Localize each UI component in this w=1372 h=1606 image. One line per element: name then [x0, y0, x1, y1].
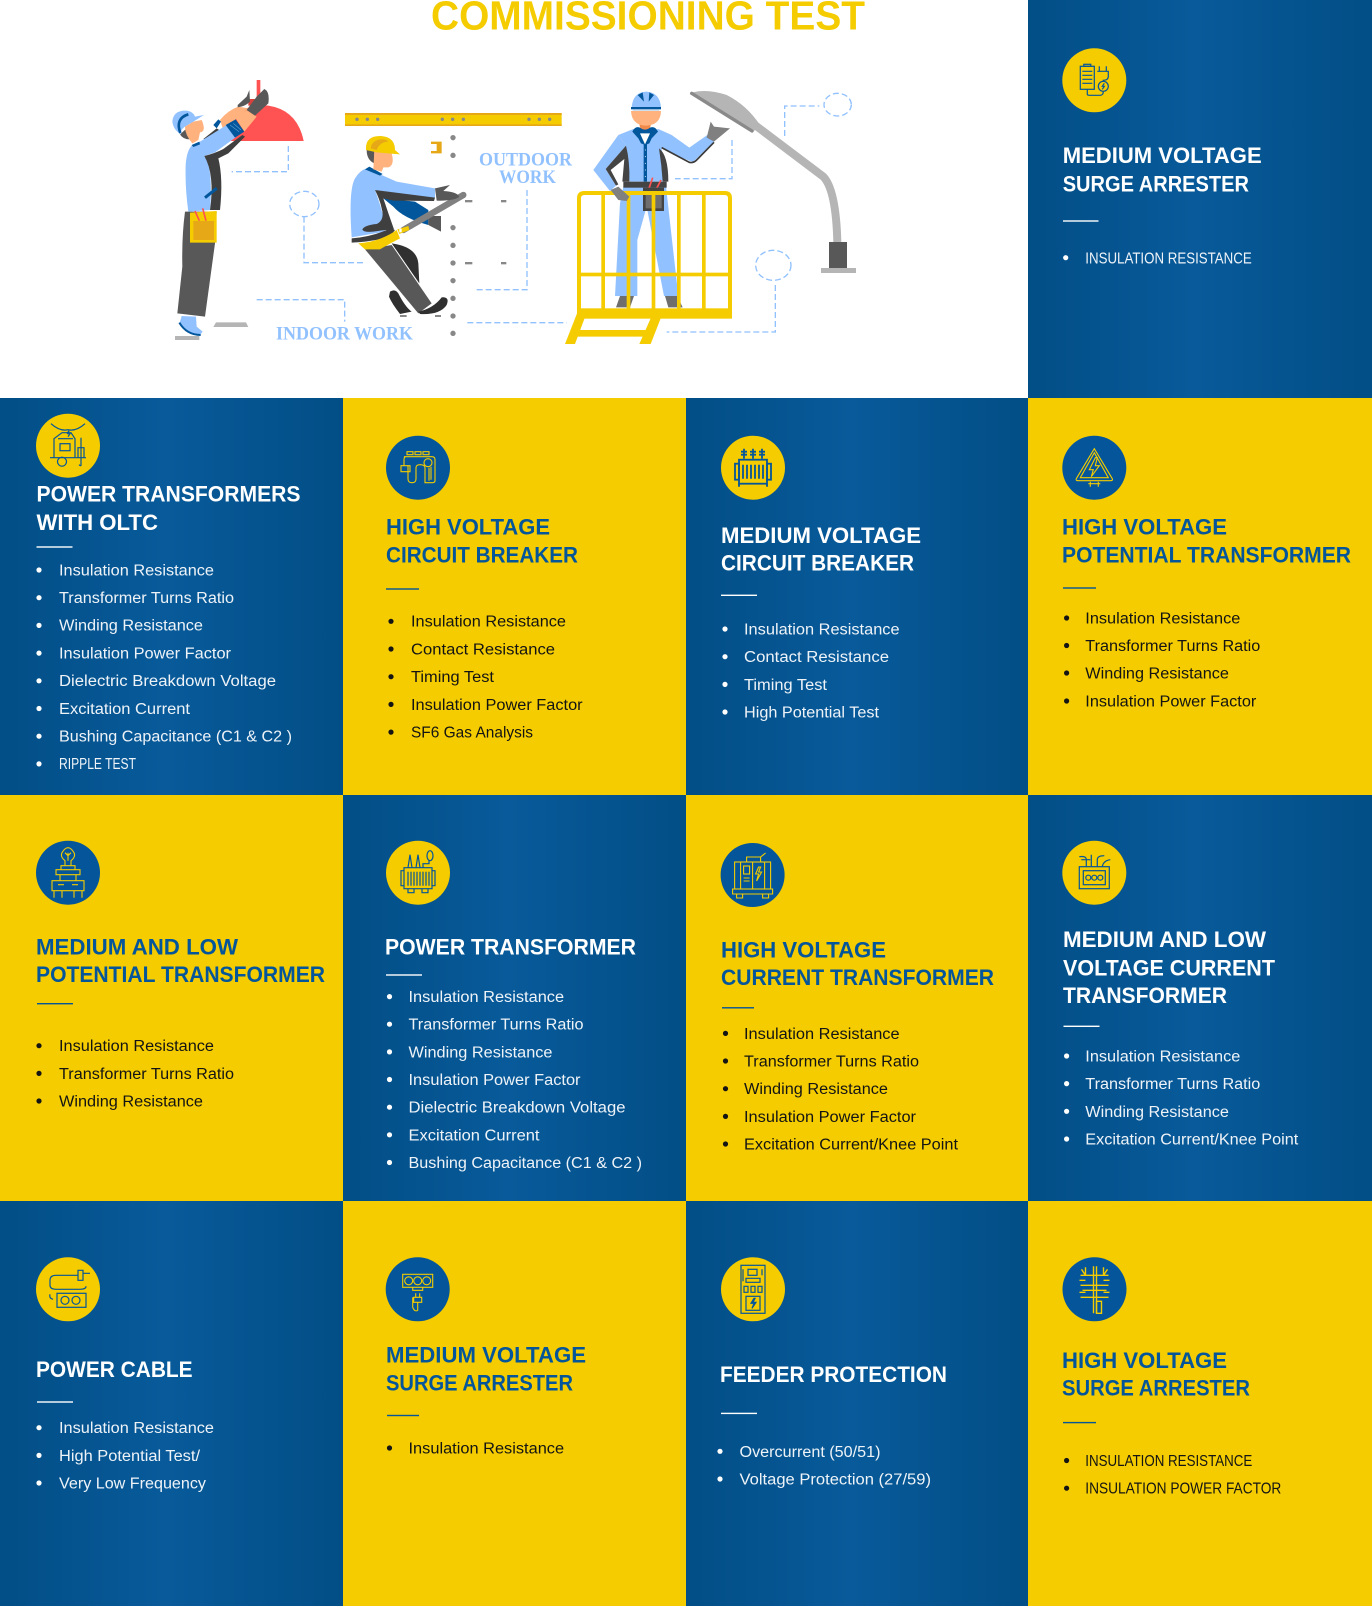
test list: Insulation Resistance [744, 622, 900, 638]
panel: medium voltage circuit breaker [686, 398, 1028, 795]
test list: Bushing Capacitance (C1 & C2 ) [59, 728, 292, 746]
panel: feeder protection [686, 1201, 1028, 1606]
test list: Transformer Turns Ratio [59, 590, 234, 607]
test list: Insulation Resistance [59, 1038, 214, 1055]
panel: high voltage current transformer [686, 795, 1028, 1201]
test list: Insulation Power Factor [1085, 694, 1256, 710]
test list [36, 1420, 214, 1492]
heading: FEEDER PROTECTION [720, 1362, 947, 1387]
label: indoor work: INDOOR WORK [276, 323, 413, 344]
icon: high voltage warning triangle [1062, 436, 1126, 500]
icon: metering box with wires [1062, 841, 1126, 905]
heading: SURGE ARRESTER [1062, 1376, 1250, 1400]
test list [1064, 1048, 1299, 1148]
heading: CIRCUIT BREAKER [386, 543, 578, 568]
illustration part: indoor workers [172, 80, 567, 340]
panel: high voltage surge arrester [1028, 1201, 1372, 1606]
heading: SURGE ARRESTER [1063, 172, 1249, 197]
worker three upper body [593, 92, 730, 211]
heading: HIGH VOLTAGE [1062, 514, 1227, 539]
heading: HIGH VOLTAGE [386, 514, 550, 539]
heading: POWER TRANSFORMERS [36, 482, 300, 507]
heading [36, 934, 325, 987]
test list: Voltage Protection (27/59) [740, 1472, 931, 1488]
heading: CIRCUIT BREAKER [721, 551, 914, 576]
test list: Insulation Resistance [744, 1026, 900, 1043]
test list [717, 1444, 931, 1488]
label: outdoor work: WORK [499, 167, 556, 188]
heading: VOLTAGE CURRENT [1063, 956, 1275, 981]
test list: Winding Resistance [59, 1094, 203, 1110]
test list: Winding Resistance [59, 618, 203, 635]
label: outdoor work [479, 150, 572, 188]
heading [1062, 514, 1351, 568]
test list: Insulation Resistance [1085, 1048, 1240, 1066]
panel: high voltage circuit breaker [343, 398, 686, 795]
test list: High Potential Test/ [59, 1448, 201, 1465]
panel: medium voltage surge arrester (top) [1028, 0, 1372, 398]
icon: battery and plug [1062, 48, 1126, 112]
test list: Overcurrent (50/51) [740, 1444, 880, 1461]
icon: utility pole [1062, 1257, 1126, 1321]
icon: protection relay panel [721, 1257, 785, 1321]
icon: cable and socket [36, 1257, 100, 1321]
heading: MEDIUM VOLTAGE [721, 523, 921, 548]
test list [722, 622, 900, 722]
illustration part: outdoor worker and street lamp [565, 91, 856, 344]
test list: Insulation Resistance [59, 562, 214, 579]
test list: Winding Resistance [1085, 1104, 1229, 1121]
test list: Winding Resistance [744, 1081, 888, 1098]
test list [388, 614, 583, 742]
heading: POWER TRANSFORMER [385, 934, 636, 960]
heading: POWER CABLE [36, 1357, 193, 1382]
test list [387, 989, 642, 1172]
panel: medium voltage surge arrester (bottom) [343, 1201, 686, 1606]
test list: Insulation Resistance [1085, 610, 1240, 628]
heading [386, 514, 578, 568]
heading [386, 1343, 586, 1395]
heading: HIGH VOLTAGE [1062, 1348, 1227, 1373]
panel: power transformer [343, 795, 686, 1201]
heading: MEDIUM VOLTAGE [1063, 143, 1262, 168]
heading: POTENTIAL TRANSFORMER [1062, 543, 1351, 568]
test list: INSULATION RESISTANCE [1085, 1453, 1252, 1470]
test list: Insulation Power Factor [408, 1072, 580, 1089]
test list: Timing Test [411, 669, 495, 686]
test list: RIPPLE TEST [59, 756, 136, 773]
test list [1064, 1453, 1281, 1498]
test list [36, 1038, 234, 1110]
test list: Insulation Resistance [408, 989, 564, 1006]
test list: Transformer Turns Ratio [1085, 1076, 1260, 1093]
panel: power transformers with OLTC [0, 398, 343, 795]
heading: TRANSFORMER [1063, 983, 1227, 1008]
heading: WITH OLTC [36, 510, 158, 535]
test list: Dielectric Breakdown Voltage [59, 673, 276, 690]
test list: Transformer Turns Ratio [59, 1066, 234, 1083]
heading: HIGH VOLTAGE [721, 938, 886, 962]
test list: Excitation Current [59, 701, 191, 718]
test list: Insulation Power Factor [744, 1109, 916, 1126]
test list: Insulation Resistance [59, 1420, 214, 1437]
test list: Excitation Current [408, 1127, 540, 1144]
heading: POTENTIAL TRANSFORMER [36, 962, 325, 987]
heading: MEDIUM AND LOW [1063, 927, 1267, 952]
test list [723, 1026, 959, 1154]
icon: mobile test trailer [36, 414, 100, 478]
test list [1064, 610, 1260, 710]
test list: Contact Resistance [744, 649, 889, 666]
icon: power strip [386, 1257, 450, 1321]
icon: circuit breaker [386, 436, 450, 500]
heading: CURRENT TRANSFORMER [721, 965, 994, 990]
test list: Transformer Turns Ratio [744, 1054, 919, 1070]
test list: Transformer Turns Ratio [1085, 638, 1260, 655]
panel: medium and low potential transformer [0, 795, 343, 1201]
heading: SURGE ARRESTER [386, 1370, 573, 1395]
heading: MEDIUM AND LOW [36, 934, 239, 960]
illustration: indoor and outdoor electrical workers [172, 80, 856, 344]
heading [1063, 143, 1262, 197]
test list: Insulation Power Factor [59, 645, 231, 662]
test list: Timing Test [744, 677, 828, 694]
test list: Very Low Frequency [59, 1476, 206, 1492]
heading [721, 523, 921, 576]
test list: Insulation Resistance [408, 1440, 564, 1458]
icon: transformer [721, 436, 785, 500]
worker two with tool [351, 136, 463, 314]
icon: potential transformer [36, 841, 100, 905]
test list [36, 562, 292, 773]
test list: Winding Resistance [1085, 666, 1229, 682]
icon: current transformer cabinet [721, 843, 785, 907]
test list: Contact Resistance [411, 641, 555, 658]
test list: Excitation Current/Knee Point [1085, 1132, 1299, 1148]
test list: Winding Resistance [408, 1044, 552, 1061]
test list: Excitation Current/Knee Point [744, 1136, 959, 1154]
test list: Insulation Resistance [411, 614, 566, 631]
panel: high voltage potential transformer [1028, 398, 1372, 795]
test list: Dielectric Breakdown Voltage [408, 1100, 626, 1117]
test list: SF6 Gas Analysis [411, 724, 533, 742]
worker one and ceiling lamp [172, 80, 304, 317]
test list: INSULATION POWER FACTOR [1085, 1481, 1281, 1498]
heading: MEDIUM VOLTAGE [386, 1343, 586, 1368]
panel: power cable [0, 1201, 343, 1606]
test list: Insulation Power Factor [411, 697, 583, 714]
test list: High Potential Test [744, 704, 880, 722]
heading [1062, 1348, 1250, 1400]
label: outdoor work: OUTDOOR [479, 150, 572, 171]
heading [721, 938, 994, 990]
heading [1063, 927, 1275, 1008]
heading [36, 482, 300, 535]
test list: Transformer Turns Ratio [408, 1017, 584, 1034]
test list: INSULATION RESISTANCE [1085, 250, 1252, 267]
test list: Bushing Capacitance (C1 & C2 ) [408, 1155, 642, 1172]
panel: medium and low voltage current transformer [1028, 795, 1372, 1201]
icon: power transformer with bushings [386, 841, 450, 905]
